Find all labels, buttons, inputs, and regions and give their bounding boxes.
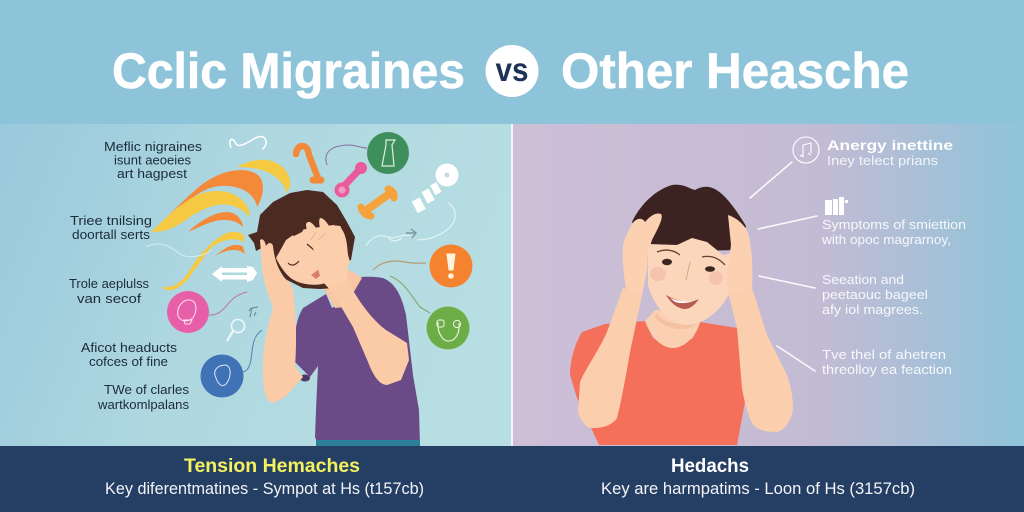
icon: music note circle bbox=[793, 137, 819, 163]
neck shadow bbox=[655, 312, 698, 329]
right captions bbox=[821, 137, 966, 377]
icon: pink dumbbell bbox=[336, 162, 367, 196]
right hand bbox=[306, 218, 348, 293]
icon: green tube circle bbox=[367, 132, 409, 174]
pointer lines bbox=[750, 162, 817, 371]
eyes and brows bbox=[657, 250, 725, 272]
caption: seeation: peetaouc bageel bbox=[822, 287, 928, 302]
caption: twe: wartkomlpalans bbox=[97, 397, 189, 412]
footer band bbox=[0, 446, 1024, 512]
icon: white chain squiggle bbox=[366, 203, 455, 246]
shirt bbox=[295, 277, 420, 445]
caption: seeation: afy iol magrees. bbox=[822, 302, 923, 317]
icon: orange alert circle bbox=[430, 244, 472, 288]
caption: triee: Triee tnilsing bbox=[70, 213, 152, 228]
caption: tve bbox=[822, 347, 952, 377]
icon: pink circle bbox=[167, 291, 209, 333]
hair back bbox=[632, 185, 746, 252]
vs badge bbox=[486, 45, 538, 97]
cheeks bbox=[650, 267, 723, 285]
caption: meflic: isunt aeoeies bbox=[114, 154, 191, 168]
icon: magnifier bbox=[227, 320, 244, 341]
neck bbox=[322, 270, 362, 308]
caption: anergy: Iney telect prians bbox=[827, 154, 938, 168]
connector: tan curve to alert bbox=[373, 261, 426, 270]
caption: symptoms: Symptoms of smiettion bbox=[822, 217, 966, 232]
caption: meflic: art hagpest bbox=[117, 166, 187, 181]
right forearm bbox=[330, 279, 409, 385]
closed eye and mouth bbox=[288, 244, 314, 265]
connector: green curve bbox=[390, 276, 430, 313]
footer right text: Key are harmpatims - Loon of Hs (3157cb) bbox=[601, 479, 915, 498]
caption: triee bbox=[70, 213, 152, 242]
caption: aficot bbox=[81, 340, 178, 369]
title: right: Other Heasche bbox=[561, 43, 909, 99]
caption: anergy bbox=[827, 137, 953, 168]
face bbox=[276, 224, 350, 285]
caption: seeation: Seeation and bbox=[822, 272, 904, 287]
connector: blue curve bbox=[243, 330, 262, 372]
caption: twe: TWe of clarles bbox=[104, 382, 190, 397]
footer left heading: Tension Hemaches bbox=[184, 456, 360, 477]
finger shadow bbox=[311, 232, 326, 240]
connector: pink curve bbox=[209, 292, 247, 315]
caption: tve: threolloy ea feaction bbox=[822, 362, 952, 377]
icon: orange hook bbox=[296, 146, 321, 180]
caption: trole: Trole aeplulss bbox=[69, 276, 149, 291]
icon: white disc bbox=[436, 164, 458, 186]
nose bbox=[686, 262, 690, 280]
shirt bbox=[570, 321, 745, 445]
face bbox=[648, 238, 735, 325]
sleeve cuff bbox=[300, 374, 310, 382]
icon: white hash marks bbox=[412, 182, 441, 213]
left captions bbox=[69, 139, 203, 412]
caption: trole bbox=[69, 276, 149, 306]
caption: aficot: Aficot headucts bbox=[81, 340, 178, 355]
decorative swooshes bbox=[152, 160, 290, 290]
icon: small gray chain arrow bbox=[406, 229, 416, 238]
icon: green face circle bbox=[426, 306, 470, 350]
caption: meflic: Meflic nigraines bbox=[104, 139, 203, 154]
connector: purple curve to green icon bbox=[326, 145, 367, 165]
caption: meflic bbox=[104, 139, 203, 181]
person: headache sufferer bbox=[570, 185, 793, 445]
caption: aficot: cofces of fine bbox=[89, 354, 168, 369]
neck bbox=[645, 310, 700, 348]
icon: bars chart bbox=[825, 197, 848, 215]
title: left: Cclic Migraines bbox=[112, 43, 465, 99]
person: migraine sufferer bbox=[248, 190, 420, 446]
icon: white double arrow bbox=[212, 266, 257, 282]
right hand bbox=[726, 215, 752, 295]
mouth bbox=[666, 295, 699, 309]
panel: right other headaches bbox=[512, 124, 1024, 446]
vs badge: vs bbox=[496, 51, 528, 88]
left hand bbox=[623, 213, 662, 295]
icon: small gray arrow bbox=[249, 307, 258, 317]
icon: white squiggle bbox=[230, 137, 266, 149]
footer right heading: Hedachs bbox=[671, 456, 749, 477]
footer left text: Key diferentmatines - Sympot at Hs (t157cb) bbox=[105, 479, 424, 498]
caption: seeation bbox=[822, 272, 928, 317]
header band bbox=[0, 0, 1024, 124]
caption: symptoms bbox=[821, 217, 966, 247]
caption: triee: doortall serts bbox=[72, 227, 151, 242]
caption: twe bbox=[97, 382, 190, 412]
caption: symptoms: with opoc magrarnoy, bbox=[821, 232, 951, 247]
left forearm and hand bbox=[260, 239, 303, 403]
left arm bbox=[578, 288, 642, 428]
caption: tve: Tve thel of ahetren bbox=[822, 347, 946, 362]
icon: blue circle bbox=[200, 354, 244, 398]
right arm bbox=[727, 288, 793, 432]
divider bbox=[511, 124, 513, 446]
icon: white thin curve bbox=[146, 244, 212, 257]
icon: orange dumbbell bbox=[361, 189, 394, 216]
caption: trole: van secof bbox=[77, 291, 141, 306]
panel: left migraine bbox=[0, 124, 512, 446]
jeans bbox=[316, 440, 420, 446]
hair back bbox=[248, 190, 355, 289]
hair fringe bbox=[264, 205, 344, 258]
caption: anergy: Anergy inettine bbox=[827, 137, 953, 153]
